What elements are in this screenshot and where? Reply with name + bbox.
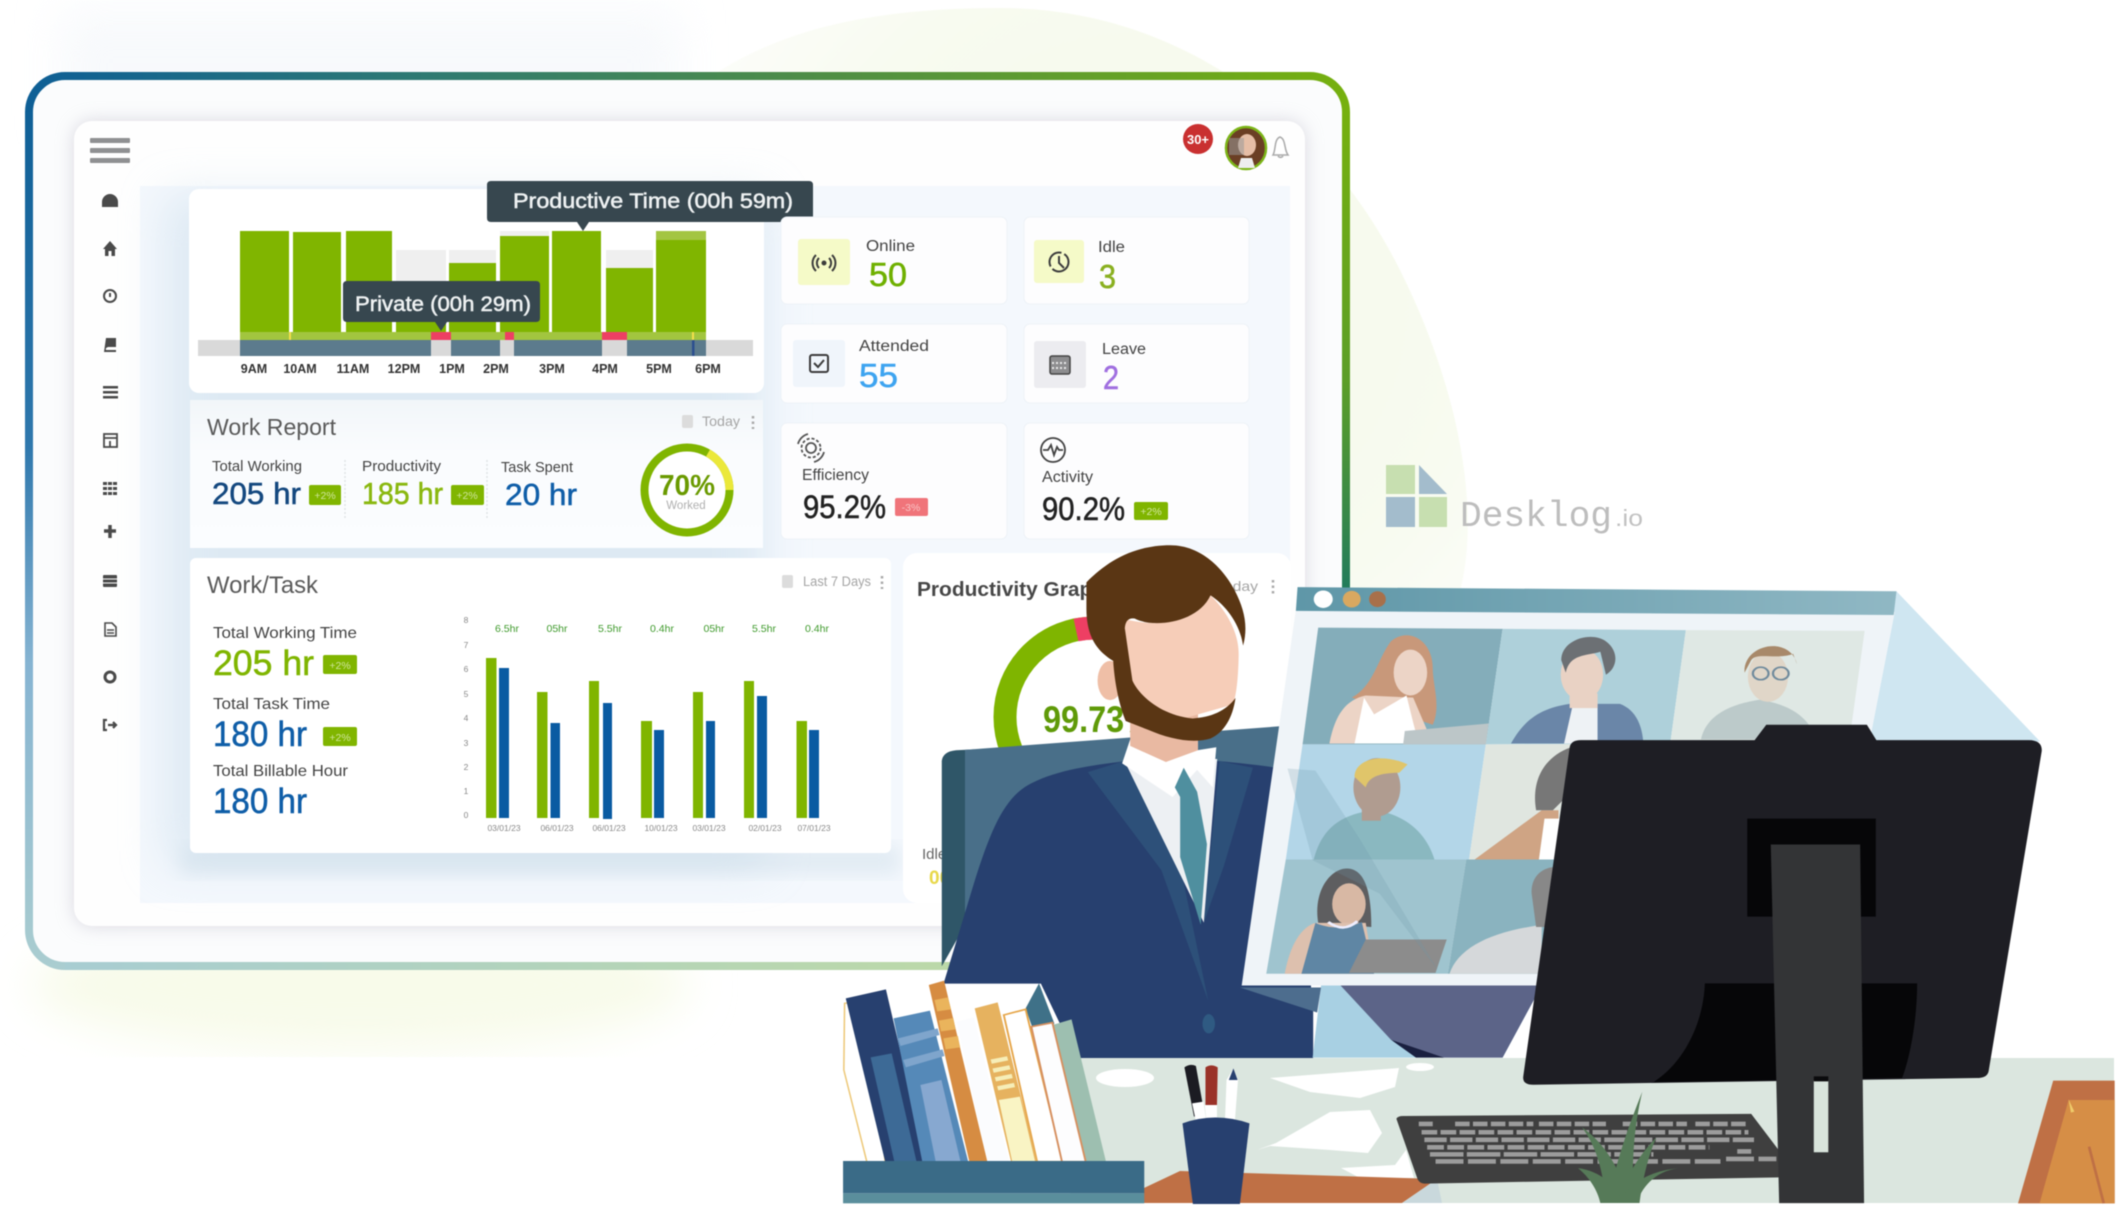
axis: hours (241, 362, 721, 376)
panel: timeline chart (189, 181, 813, 393)
axis: hours: 3PM (539, 362, 565, 376)
dashboard frame (29, 76, 1346, 966)
axis: hours: 5PM (646, 362, 672, 376)
bar chart: work vs task: 7 (464, 640, 469, 650)
teal book (1026, 983, 1054, 1047)
card: online (781, 217, 1007, 304)
icon: clock (104, 290, 116, 302)
metric: total billable hour: 180 hr (213, 782, 307, 821)
panel: work report (190, 400, 763, 548)
ear (1098, 661, 1123, 700)
panel: work/task (190, 558, 891, 853)
bar chart: work vs task: 3 (464, 738, 469, 748)
card: efficiency: Efficiency (802, 467, 869, 484)
tooltip: private time (343, 281, 540, 331)
card: leave: Leave (1102, 341, 1146, 358)
metric: productivity (362, 458, 484, 511)
card: activity: 90.2% (1042, 491, 1125, 527)
bar chart: work vs task: 5.5hr (752, 623, 776, 635)
heading: productivity graph: Productivity Graph (917, 579, 1105, 601)
metric: task spent: Task Spent (501, 459, 574, 476)
tooltip: productive time: Productive Time (00h 59m) (513, 189, 793, 213)
metric: total working time (213, 625, 357, 683)
header: notifications and avatar (1183, 124, 1288, 169)
metric: total task time: +2% (329, 732, 351, 744)
bar chart: work vs task: 05hr (546, 623, 568, 635)
participant: man with blazer (1511, 637, 1643, 744)
axis: hours: 12PM (388, 362, 420, 376)
donut: 70% worked: Worked (666, 500, 706, 512)
logo: Desklog.io: Desklog (1460, 496, 1612, 537)
idle stat (922, 846, 962, 889)
metric: total task time: Total Task Time (213, 696, 330, 713)
app window (74, 121, 1305, 926)
background glow: green blob (60, 8, 1468, 800)
bar chart: work vs task (464, 615, 831, 833)
bar chart: work vs task: 5 (464, 689, 469, 699)
icon: calendar (103, 575, 117, 587)
bar chart: work vs task: 6 (464, 664, 469, 674)
axis: hours: 1PM (439, 362, 465, 376)
light cones (1240, 591, 2040, 1058)
desk (1070, 1058, 2114, 1203)
book stand (843, 1161, 1144, 1203)
illustration: video call screen (1240, 587, 2040, 1058)
chart: hourly stacked bars (198, 231, 753, 356)
card: leave: 2 (1103, 359, 1119, 396)
card: idle: Idle (1098, 239, 1125, 256)
logo: Desklog.io: .io (1615, 505, 1643, 531)
date filter (682, 413, 753, 429)
axis: hours: 6PM (695, 362, 721, 376)
card: attended: Attended (859, 338, 929, 355)
card: efficiency (781, 423, 1007, 539)
bar chart: work vs task: 6.5hr (495, 623, 519, 635)
bar chart: work vs task: 4 (464, 713, 469, 723)
participant: woman with red hair (1329, 635, 1489, 744)
bar chart: work vs task: 06/01/23 (592, 823, 626, 833)
metric: total billable hour: Total Billable Hour (213, 763, 349, 780)
icon: dashboard (102, 194, 118, 207)
card: attended (781, 324, 1007, 403)
participant: blond person (1314, 758, 1434, 859)
bar chart: work vs task: 03/01/23 (487, 823, 521, 833)
window frame (1242, 610, 1895, 985)
participant: woman with laptop (1285, 869, 1447, 974)
icon: bell (1273, 137, 1288, 157)
bar chart: work vs task: 0.4hr (805, 623, 829, 635)
idle stat: 00h (929, 868, 962, 889)
icon: plus (104, 525, 116, 538)
card: online: 50 (869, 256, 907, 293)
bar chart: work vs task: 8 (464, 615, 469, 625)
white back book (844, 1000, 885, 1162)
bar chart: work vs task: 02/01/23 (748, 823, 782, 833)
metric: total working time: Total Working Time (213, 625, 357, 642)
metric: total working time: 205 hr (213, 644, 314, 683)
tooltip: productive time (487, 181, 813, 231)
axis: hours: 9AM (241, 362, 267, 376)
metric: total working time: +2% (329, 660, 351, 672)
bar chart: work vs task: 0.4hr (650, 623, 674, 635)
bar chart: work vs task: 0 (464, 810, 469, 820)
axis: hours: 10AM (283, 362, 317, 376)
heading: work report: Work Report (207, 414, 336, 440)
card: idle: 3 (1099, 258, 1116, 295)
stat cards (781, 217, 1249, 539)
donut: 70% worked (644, 448, 730, 532)
date filter: Today (702, 413, 740, 429)
pen holder (1183, 1065, 1249, 1204)
navy book (846, 989, 926, 1162)
axis: hours: 11AM (337, 362, 369, 376)
icon: home (103, 241, 117, 256)
neck (1130, 696, 1198, 762)
icon: logout (104, 720, 116, 730)
tooltip: private time: Private (00h 29m) (355, 292, 531, 316)
gold book (975, 1002, 1037, 1162)
metric: productivity: 185 hr (362, 476, 443, 511)
bar chart: work vs task: 03/01/23 (692, 823, 726, 833)
cup (1183, 1117, 1249, 1204)
blue book (894, 1011, 968, 1162)
donut: productivity score (1005, 628, 1183, 806)
donut: productivity score: 99.73% (1043, 699, 1153, 740)
date filter: Last 7 Days (803, 574, 871, 589)
bar chart: work vs task: 5.5hr (598, 623, 622, 635)
icon: list (103, 386, 118, 398)
bar chart: work vs task: 07/01/23 (797, 823, 831, 833)
metric: total task time (213, 696, 357, 754)
white book (1004, 1009, 1063, 1162)
card: attended: 55 (859, 357, 898, 394)
icon: menu (90, 138, 130, 163)
metric: task spent: 20 hr (505, 477, 577, 512)
pens (1184, 1065, 1238, 1130)
metric: productivity: Productivity (362, 458, 442, 475)
icon: document (105, 623, 116, 636)
bar chart: work vs task: 05hr (703, 623, 725, 635)
icon: table (104, 434, 117, 447)
shirt and tie (1122, 739, 1217, 925)
metric: total working (212, 458, 341, 511)
card: leave (1024, 324, 1249, 403)
card: efficiency: -3% (902, 502, 920, 514)
hair (1086, 545, 1245, 741)
card: activity (1024, 423, 1249, 539)
bar chart: work vs task: 06/01/23 (540, 823, 574, 833)
participant: man with glasses (1701, 646, 1815, 739)
logo: Desklog.io (1386, 465, 1643, 537)
idle stat: Idle (922, 846, 946, 863)
jacket (944, 761, 1313, 1059)
white book (1031, 1023, 1086, 1162)
metric: total billable hour (213, 763, 349, 821)
bar chart: work vs task: 1 (464, 786, 469, 796)
metric: total task time: 180 hr (213, 715, 307, 754)
orange book (929, 981, 987, 1162)
card: idle (1024, 217, 1249, 304)
face (1124, 595, 1239, 720)
bar chart: work vs task: 10/01/23 (644, 823, 678, 833)
date filter: Today (1216, 578, 1258, 594)
icon: grid (103, 482, 117, 495)
axis: hours: 4PM (592, 362, 618, 376)
card: activity: +2% (1140, 506, 1162, 518)
card: activity: Activity (1042, 469, 1093, 486)
cardboard box on desk (1144, 1171, 1442, 1203)
metric: total working: 205 hr (212, 476, 301, 511)
icon: settings (105, 672, 115, 682)
participant: person with bare arm (1475, 748, 1570, 859)
date filter (1216, 578, 1273, 594)
panel: productivity graph (903, 553, 1291, 903)
icon: book (104, 338, 116, 352)
metric: total working: +2% (314, 490, 336, 502)
axis: hours: 2PM (483, 362, 509, 376)
video cell grid (1266, 628, 1865, 974)
avatar (1226, 127, 1266, 169)
background glow: below frame (0, 919, 1000, 1117)
plant (1578, 1092, 1679, 1203)
notification badge: 30+ (1187, 132, 1209, 147)
sidebar (90, 138, 130, 730)
participant: grey haired man (1450, 867, 1558, 974)
books (843, 981, 1144, 1203)
heading: work/task: Work/Task (207, 572, 319, 599)
card: online: Online (866, 238, 915, 255)
metric: productivity: +2% (456, 490, 478, 502)
donut: 70% worked: 70% (659, 470, 715, 502)
jacket reflection (1287, 769, 1438, 971)
monitor (1523, 725, 2042, 1203)
keyboard (1396, 1114, 1782, 1184)
white book (957, 1017, 1009, 1162)
bar chart: work vs task: 2 (464, 762, 469, 772)
illustration: man at desk (942, 545, 1313, 1059)
metric: total working: Total Working (212, 458, 302, 475)
orange box on right (2018, 1081, 2115, 1203)
sage book (1052, 1019, 1106, 1162)
card: efficiency: 95.2% (803, 489, 886, 525)
window title bar (1296, 587, 1896, 615)
metric: task spent (501, 459, 577, 512)
desk highlights (1096, 1063, 1434, 1178)
chair (942, 726, 1280, 966)
